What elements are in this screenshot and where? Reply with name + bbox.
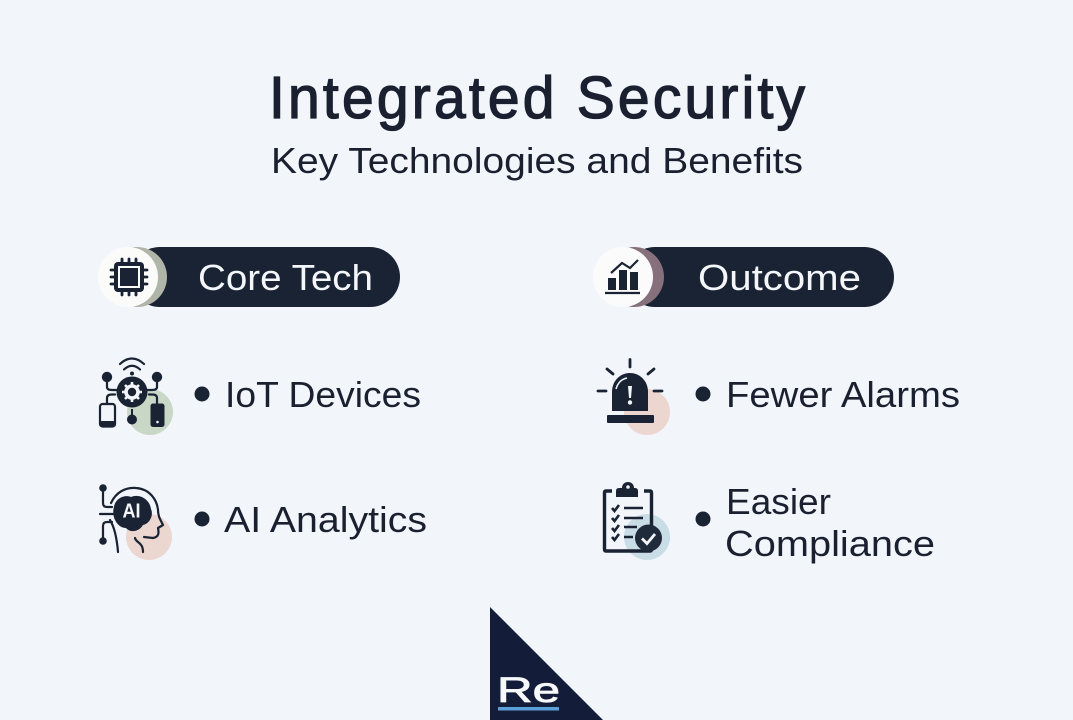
icon: IoT devices <box>100 358 173 435</box>
subtitle: Key Technologies and Benefits <box>271 140 803 181</box>
text: easier compliance: Easier <box>726 481 831 522</box>
logo: Re corner triangle: Re <box>497 671 560 710</box>
icon: compliance clipboard <box>604 482 670 560</box>
icon: microchip <box>111 259 147 295</box>
bullet: easier compliance <box>696 512 710 526</box>
bullet: fewer alarms <box>696 386 710 402</box>
icon: bar chart with trend line <box>605 260 640 293</box>
bullet: AI analytics <box>194 512 210 526</box>
panel: outcome header <box>593 247 894 307</box>
icon: alarm beacon <box>598 360 670 435</box>
icon: AI head: AI <box>122 500 140 522</box>
text: fewer alarms: Fewer Alarms <box>726 374 960 415</box>
logo: Re corner triangle <box>490 607 603 720</box>
panel: core tech header <box>98 247 400 307</box>
title: Integrated Security <box>269 65 805 131</box>
text: IoT devices: IoT Devices <box>225 374 421 415</box>
text: AI analytics: AI Analytics <box>224 499 427 540</box>
heading: core tech: Core Tech <box>198 257 373 298</box>
heading: outcome: Outcome <box>698 257 861 298</box>
text: easier compliance: Compliance <box>725 523 935 564</box>
bullet: IoT devices <box>194 386 210 402</box>
icon: AI head <box>99 484 172 560</box>
text: easier compliance <box>725 481 935 564</box>
